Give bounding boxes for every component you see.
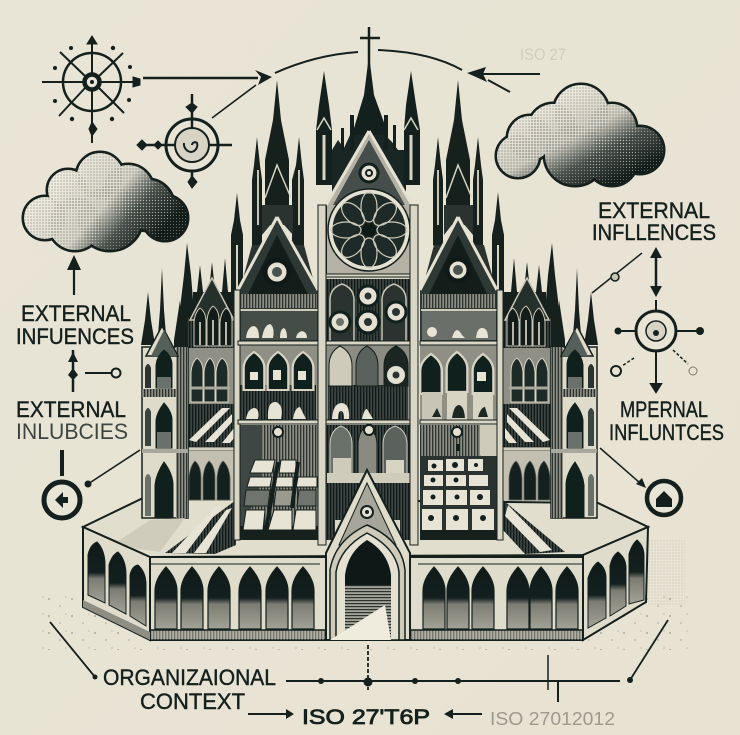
arrow: under right target xyxy=(651,384,661,392)
connector: left middle xyxy=(68,350,120,392)
text: external influences left top xyxy=(16,301,134,349)
icon: spiral target xyxy=(137,94,232,188)
left wing xyxy=(141,243,236,518)
white figures on shelf xyxy=(246,324,307,338)
white figures on shelf xyxy=(427,327,488,338)
text: internal influences right lower xyxy=(609,397,724,445)
connector: emblem to wing left xyxy=(84,450,140,488)
panel: lower left room with cards xyxy=(238,425,318,540)
cards xyxy=(243,460,317,530)
icon: right target xyxy=(592,253,704,392)
arrow: double under right cloud xyxy=(650,247,662,297)
panel: left bay gable xyxy=(238,217,318,342)
icon: lower left emblem xyxy=(44,482,80,518)
cards xyxy=(422,459,494,530)
roundel in gable xyxy=(360,164,378,182)
right arches xyxy=(420,352,493,394)
doorway xyxy=(345,540,391,640)
panel: base front wall with arcade xyxy=(150,557,583,640)
arrow: line up to spire xyxy=(212,85,256,118)
arc over the cathedral xyxy=(275,50,462,73)
text: organizational context: CONTEXT xyxy=(140,689,245,714)
arches right xyxy=(423,567,578,629)
cloud: right xyxy=(497,85,663,185)
arrow: context to ISO xyxy=(248,709,294,719)
timeline with nodes xyxy=(286,645,620,702)
cloud: left xyxy=(24,153,187,250)
right wing xyxy=(503,243,598,518)
central spires and dark backdrop xyxy=(316,27,420,215)
text: external influences right top xyxy=(592,198,716,245)
arrow: pointing left at spire xyxy=(467,67,540,92)
text: external influences left lower: INLUBCIES xyxy=(16,419,128,444)
faint label top right: ISO 27 xyxy=(520,45,566,64)
panel: central gable and rose window xyxy=(326,131,412,290)
panel: left side wall xyxy=(83,527,150,640)
piers xyxy=(234,205,503,545)
figures inside upper arches xyxy=(250,370,486,381)
text: external influences left lower xyxy=(16,397,128,444)
text: organizational context xyxy=(103,665,276,714)
outer small spires xyxy=(231,192,504,300)
icon: compass wheel xyxy=(42,36,140,143)
text: external influences left top: EXTERNAL xyxy=(21,301,131,326)
right wing benches xyxy=(503,500,565,554)
text: external influences right top: EXTERNAL xyxy=(598,198,710,223)
panel: right side wall xyxy=(583,527,648,640)
panel: lower right room with cards xyxy=(420,425,498,540)
panel: central portal xyxy=(326,470,410,640)
stippled ground xyxy=(40,540,690,650)
text: ISO faded label: ISO 27012012 xyxy=(490,709,615,729)
panel: right bay gable xyxy=(420,217,497,342)
text: organizational context: ORGANIZAIONAL xyxy=(103,665,276,690)
text: ISO centre label: ISO 27'T6P xyxy=(302,706,430,729)
light floor wedge xyxy=(330,605,391,640)
connector: bottom right diagonal xyxy=(627,620,668,683)
arrow: faded ISO to centre xyxy=(444,709,482,719)
rose window xyxy=(328,189,410,271)
text: external influences left top: INFUENCES xyxy=(16,324,134,349)
white figures lower storey xyxy=(246,402,373,419)
connector: left lower to circle xyxy=(60,450,64,476)
text: internal influences right lower: MPERNAL xyxy=(620,397,708,422)
connector: lower right to emblem xyxy=(600,448,646,488)
panel: third storey arches xyxy=(238,343,497,423)
arrow: up under left cloud xyxy=(67,255,81,295)
left spire group xyxy=(240,80,316,290)
left arches xyxy=(244,352,313,390)
left wing benches xyxy=(112,500,236,554)
connector: bottom left diagonal xyxy=(50,622,98,680)
arches left xyxy=(155,567,314,629)
panel: central upper arcade with roundels xyxy=(326,275,410,342)
centre arches xyxy=(329,346,408,386)
icon: lower right emblem xyxy=(647,481,681,515)
text: external influences right top: INFLLENCES xyxy=(592,220,716,245)
right spire group xyxy=(422,80,496,290)
arrow: wheel to spire xyxy=(143,70,272,85)
panel: central lower arches xyxy=(326,425,410,540)
text: external influences left lower: EXTERNAL xyxy=(16,397,126,422)
platform floor xyxy=(83,498,648,557)
